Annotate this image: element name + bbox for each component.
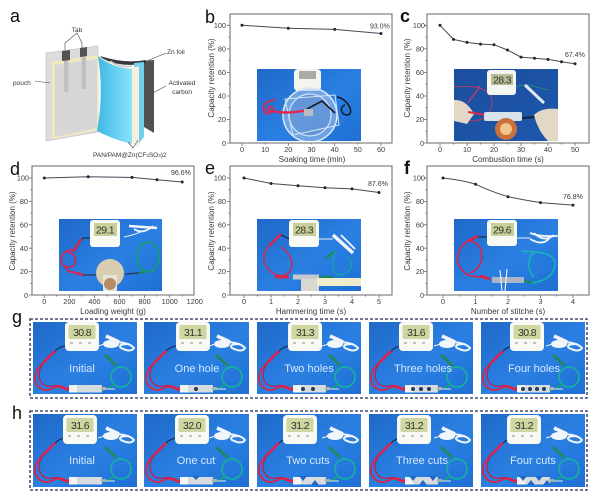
caption: Four cuts: [510, 455, 556, 467]
axes: 0: [441, 297, 445, 306]
line: 87.6%: [368, 181, 388, 188]
panel e: hammering chart: [205, 158, 392, 316]
axes: 20: [416, 115, 424, 124]
line: 76.8%: [563, 194, 583, 201]
photo: initial: [33, 322, 137, 394]
photo: combustion test: [454, 69, 558, 141]
axes: 4: [571, 297, 575, 306]
axes: 20: [416, 267, 424, 276]
photo: two holes: [257, 322, 361, 394]
axes: 0: [438, 145, 442, 154]
label d: d: [10, 159, 20, 179]
meter reading: 28.3: [493, 74, 512, 86]
axes: [403, 166, 589, 316]
axes: 60: [20, 220, 28, 230]
photo: one cut: [144, 414, 249, 487]
axes: 2: [296, 297, 300, 306]
axes: [207, 14, 392, 164]
leader lines: [35, 33, 166, 148]
panel h: cuts series: [12, 403, 587, 490]
annotations: Zn foil: [167, 49, 185, 56]
line: [240, 24, 390, 35]
axes: Capacity retention (%): [207, 191, 216, 271]
label c: c: [400, 6, 410, 26]
axes: 40: [331, 145, 339, 154]
caption: Two holes: [284, 363, 334, 375]
photo: weight on battery: [59, 219, 162, 291]
annotations: carbon: [172, 89, 192, 96]
axes: Loading weight (g): [80, 307, 146, 316]
axes: 0: [222, 291, 226, 300]
line: 93.0%: [370, 24, 390, 30]
reading 31.6: 31.6: [407, 327, 426, 339]
photo: one hole: [144, 322, 249, 394]
caption: Initial: [69, 455, 95, 467]
pouch layers: [46, 46, 98, 141]
caption: Four holes: [508, 363, 560, 375]
photo: four cuts: [481, 414, 585, 487]
axes: 10: [463, 145, 471, 154]
reading 30.8: 30.8: [73, 327, 92, 339]
photo: four holes: [481, 322, 585, 394]
panel g: holes series: [12, 307, 587, 398]
axes: [403, 14, 589, 164]
photo: three holes: [369, 322, 473, 394]
axes: 3: [538, 297, 543, 306]
axes: 30: [307, 145, 316, 154]
caption: Three holes: [394, 363, 453, 375]
axes: Capacity retention (%): [403, 38, 412, 118]
axes: 20: [490, 145, 498, 154]
photo: stitched battery: [454, 219, 558, 291]
caption: One hole: [175, 363, 219, 375]
axes: 80: [416, 197, 424, 206]
label a: a: [10, 6, 21, 26]
label b: b: [205, 7, 215, 27]
caption: Initial: [69, 363, 95, 375]
axes: 0: [222, 139, 226, 148]
axes: 0: [420, 291, 424, 300]
photo: soaked battery in water bowl: [257, 69, 361, 141]
reading 31.2: 31.2: [405, 420, 424, 432]
line: 96.6%: [171, 170, 191, 177]
line: [442, 176, 583, 207]
axes: [8, 166, 203, 316]
axes: 800: [139, 297, 151, 306]
axes: 40: [416, 92, 424, 100]
label g: g: [12, 307, 22, 327]
cell sheets: [97, 56, 154, 148]
line: [242, 176, 388, 194]
axes: 20: [20, 267, 28, 276]
axes: 0: [42, 297, 46, 306]
axes: 60: [218, 220, 226, 230]
axes: 1: [473, 297, 478, 306]
annotations: PAN/PAM@Zn(CF3SO3)2: [93, 152, 167, 159]
reading 30.8: 30.8: [518, 327, 537, 339]
axes: Number of stitche (s): [471, 307, 545, 316]
line: 67.4%: [565, 52, 585, 59]
line: [43, 170, 191, 184]
caption: Two cuts: [286, 455, 330, 467]
photo: initial: [33, 414, 137, 487]
axes: 1: [269, 297, 273, 306]
reading 31.2: 31.2: [291, 420, 310, 432]
axes: [207, 166, 392, 316]
annotations: Tab: [72, 27, 83, 34]
axes: 80: [218, 197, 226, 206]
meter reading: 28.3: [295, 224, 314, 236]
label f: f: [404, 158, 411, 178]
axes: 0: [240, 145, 244, 154]
axes: 10: [261, 145, 269, 154]
axes: 80: [20, 197, 28, 206]
caption: One cut: [177, 455, 215, 467]
meter reading: 29.1: [96, 224, 115, 236]
axes: 40: [416, 244, 424, 253]
axes: 2: [506, 297, 510, 306]
annotations: pouch: [13, 80, 31, 87]
axes: 20: [218, 115, 226, 124]
reading 31.1: 31.1: [184, 327, 203, 339]
label e: e: [205, 158, 215, 178]
axes: 30: [517, 145, 525, 154]
annotations: Activated: [169, 80, 196, 87]
axes: 100: [214, 21, 226, 30]
dashed frame: [30, 411, 587, 490]
panel b: soaking chart: [205, 7, 392, 164]
axes: 40: [544, 145, 552, 154]
reading 31.3: 31.3: [296, 327, 315, 339]
axes: 1200: [187, 297, 203, 306]
axes: 50: [354, 145, 362, 154]
axes: 3: [323, 297, 327, 306]
axes: 1000: [162, 297, 178, 306]
axes: 5: [377, 297, 381, 306]
axes: 60: [218, 68, 226, 77]
axes: 60: [416, 68, 424, 77]
axes: Capacity retention (%): [403, 191, 412, 271]
photo: two cuts: [257, 414, 361, 487]
axes: 100: [17, 174, 29, 182]
axes: 50: [571, 145, 579, 154]
axes: 100: [214, 174, 226, 182]
annotations: [13, 27, 196, 159]
panel a: pouch cell diagram: [10, 6, 196, 159]
axes: 20: [218, 267, 226, 276]
axes: 60: [377, 145, 385, 154]
label h: h: [12, 403, 22, 423]
axes: 0: [242, 297, 246, 306]
reading 32.0: 32.0: [183, 420, 202, 432]
axes: 100: [413, 174, 425, 182]
caption: Three cuts: [396, 455, 448, 467]
axes: 0: [420, 139, 424, 148]
panel c: combustion chart: [400, 6, 589, 164]
photo: three cuts: [369, 414, 473, 487]
axes: Capacity retention (%): [8, 191, 17, 271]
reading 31.6: 31.6: [71, 420, 90, 432]
meter reading: 29.6: [493, 224, 512, 236]
photo: hammer on battery: [257, 219, 361, 291]
axes: Soaking time (min): [279, 155, 346, 164]
axes: 600: [113, 297, 126, 306]
dashed frame: [30, 319, 587, 398]
axes: Hammering time (s): [276, 307, 346, 316]
axes: 4: [350, 297, 354, 306]
axes: 80: [416, 44, 424, 54]
reading 31.2: 31.2: [515, 420, 534, 432]
axes: 400: [88, 297, 101, 306]
axes: 0: [24, 291, 28, 300]
line: [438, 24, 585, 65]
axes: 40: [218, 92, 226, 100]
axes: 200: [63, 297, 75, 306]
axes: 100: [413, 21, 425, 30]
axes: 60: [416, 220, 424, 230]
axes: 80: [218, 44, 226, 54]
panel d: loading weight chart: [8, 159, 203, 316]
axes: 40: [218, 244, 226, 253]
axes: Combustion time (s): [472, 155, 544, 164]
panel f: stitches chart: [403, 158, 589, 316]
axes: 40: [20, 244, 28, 253]
axes: 20: [284, 145, 292, 154]
axes: Capacity retention (%): [207, 38, 216, 118]
